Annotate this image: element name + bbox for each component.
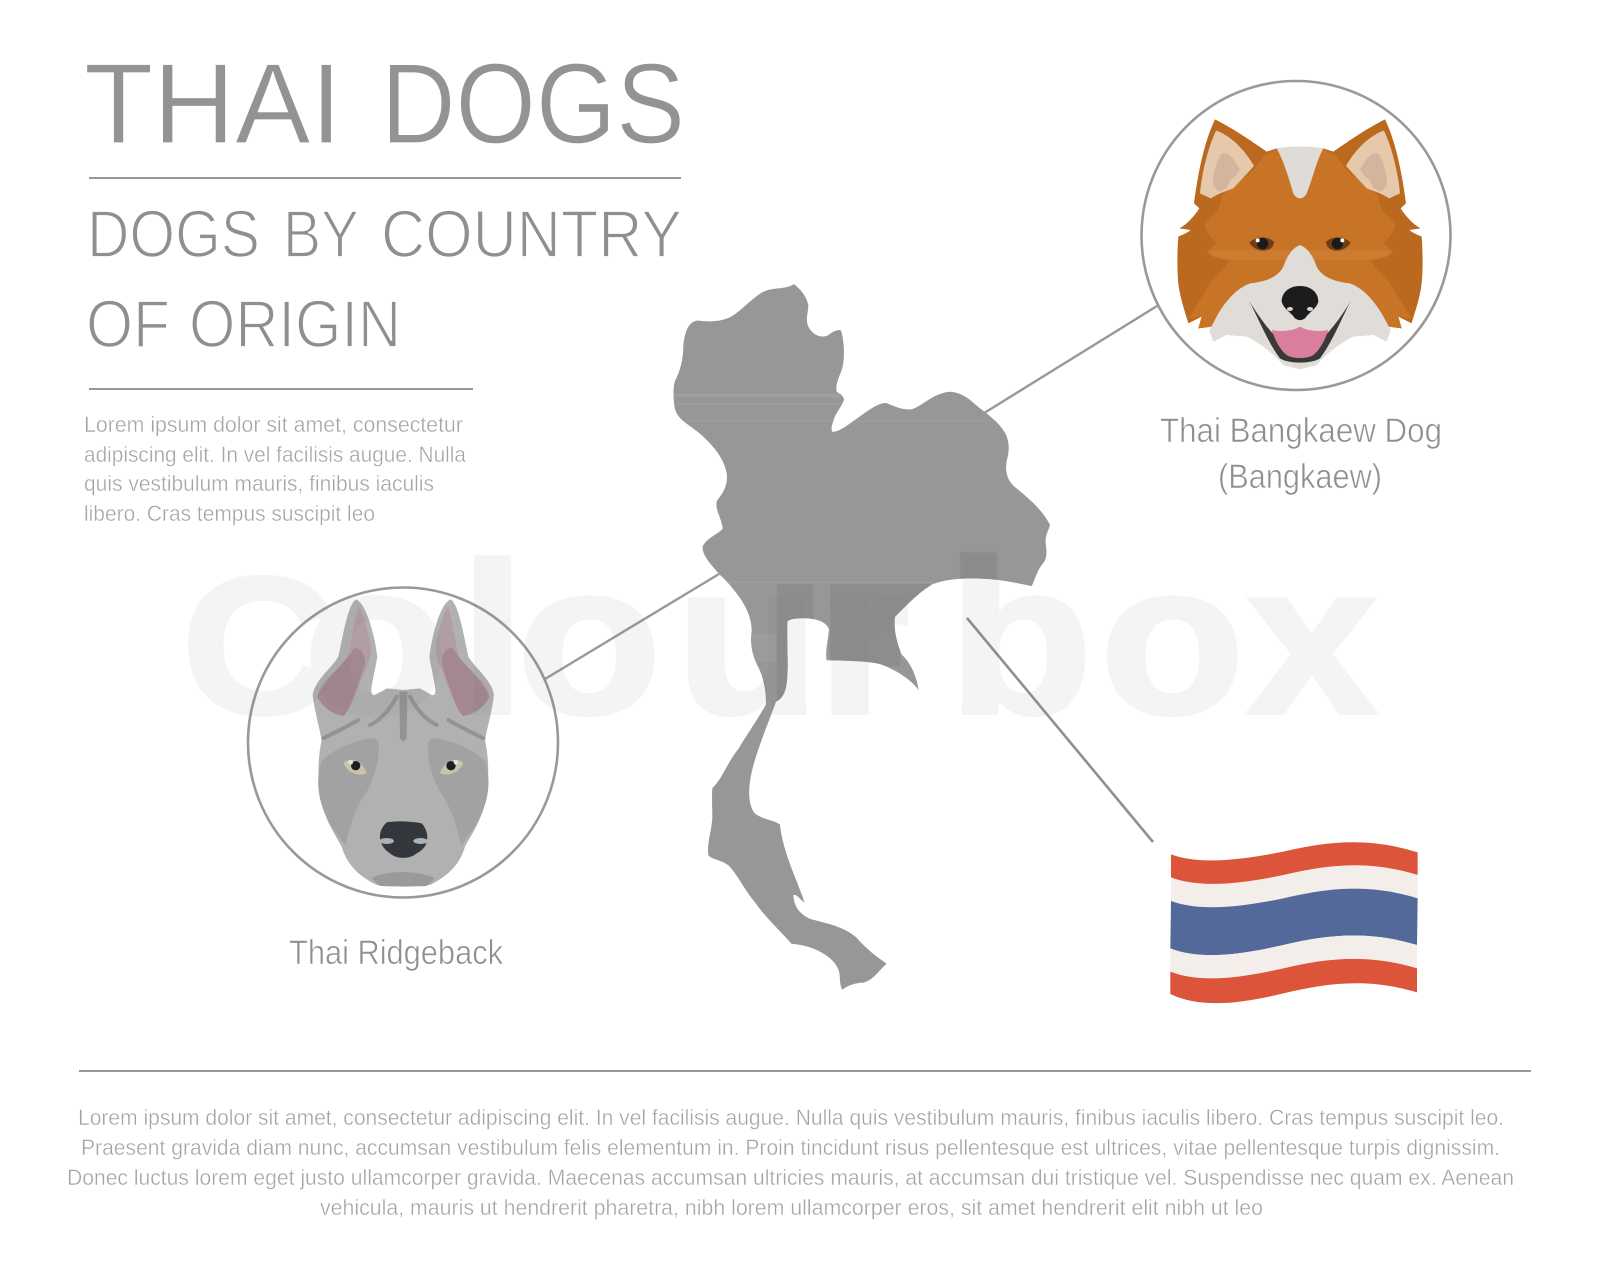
icon: Ridgeback dog head: [313, 599, 494, 887]
watermark: olourbox: [304, 518, 1378, 759]
title: DOGS: [381, 41, 685, 168]
footer paragraph: Donec luctus lorem eget justo ullamcorper gravida. Maecenas accumsan ultricies mauris, at accumsan dui tristique vel. Suspendisse nec quam ex. Aenean: [67, 1165, 1514, 1190]
label: Thai Bangkaew Dog: Thai Bangkaew Dog: [1160, 412, 1442, 450]
subtitle line 1: [87, 197, 682, 272]
footer paragraph: Lorem ipsum dolor sit amet, consectetur adipiscing elit. In vel facilisis augue. Nulla quis vestibulum mauris, finibus iaculis libero. Cras tempus suscipit leo.: [78, 1105, 1504, 1130]
intro paragraph: adipiscing elit. In vel facilisis augue. Nulla: [84, 442, 467, 467]
footer paragraph: Praesent gravida diam nunc, accumsan vestibulum felis elementum in. Proin tincidunt risus pellentesque est ultrices, vitae pellentesque turpis dignissim.: [81, 1135, 1500, 1160]
intro paragraph: libero. Cras tempus suscipit leo: [84, 501, 375, 526]
footer paragraph: vehicula, mauris ut hendrerit pharetra, nibh lorem ullamcorper eros, sit amet hendrerit elit nibh ut leo: [320, 1195, 1263, 1220]
panel: header: [84, 41, 685, 526]
intro paragraph: [84, 412, 467, 526]
intro paragraph: Lorem ipsum dolor sit amet, consectetur: [84, 412, 463, 437]
watermark: C: [182, 537, 336, 755]
icon: Bangkaew dog head: [1177, 119, 1423, 369]
subtitle line 2: [86, 287, 401, 362]
map of Thailand: [673, 284, 1050, 990]
title: [84, 41, 685, 168]
footer paragraph: [67, 1105, 1514, 1220]
label: Thai Ridgeback: Thai Ridgeback: [289, 934, 504, 972]
label: Bangkaew: (Bangkaew): [1218, 458, 1382, 496]
intro paragraph: quis vestibulum mauris, finibus iaculis: [84, 471, 434, 496]
subtitle line 2: ORIGIN: [189, 287, 401, 362]
subtitle line 1: BY: [283, 197, 359, 272]
subtitle line 2: OF: [86, 287, 170, 362]
icon: Thai flag: [1170, 842, 1418, 1003]
footer rule: [79, 1070, 1531, 1072]
panel: Thai Ridgeback: [248, 588, 558, 972]
circle: Bangkaew: [1142, 81, 1450, 390]
subtitle line 1: COUNTRY: [381, 197, 682, 272]
panel: Thai Bangkaew Dog: [1142, 81, 1450, 496]
title: THAI: [84, 41, 342, 168]
subtitle line 1: DOGS: [87, 197, 260, 272]
circle: Ridgeback: [248, 588, 558, 898]
